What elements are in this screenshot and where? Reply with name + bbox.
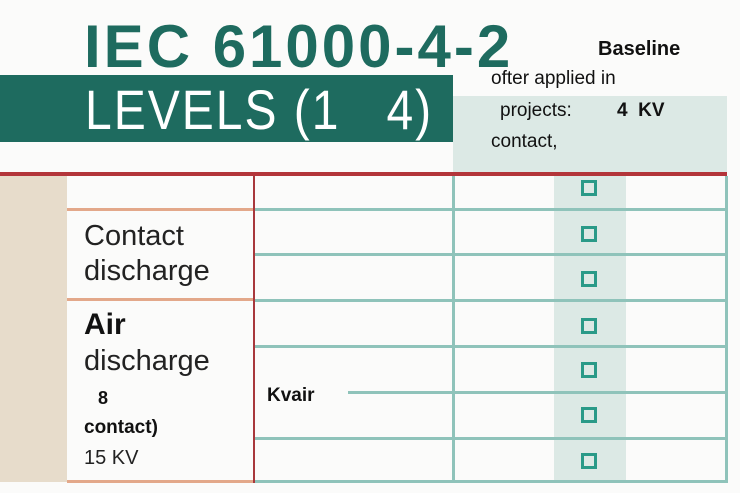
beige strip <box>0 176 67 482</box>
label: air discharge <box>84 308 210 469</box>
label: air discharge: contact) <box>84 417 158 438</box>
header band: levels <box>0 75 453 142</box>
note text <box>491 38 680 152</box>
red rule <box>0 172 727 176</box>
table <box>67 176 728 483</box>
label: contact discharge <box>84 220 210 287</box>
note text: 4 KV <box>617 100 665 121</box>
label: air discharge: Air <box>84 308 126 341</box>
title: IEC 61000-4-2 <box>84 13 513 80</box>
label: air discharge: discharge <box>84 345 210 377</box>
label: air discharge: 15 KV <box>84 447 138 469</box>
label: Kvair: Kvair <box>267 385 315 406</box>
note panel <box>453 96 727 172</box>
note text: ofter applied in <box>491 68 616 89</box>
note text: contact, <box>491 131 558 152</box>
subtitle: LEVELS (1 4) <box>85 81 433 142</box>
checkbox column <box>581 180 597 469</box>
note text: Baseline <box>598 38 680 60</box>
label: air discharge: 8 <box>98 388 108 408</box>
label: contact discharge: Contact <box>84 220 184 252</box>
label: contact discharge: discharge <box>84 255 210 287</box>
note text: projects: <box>500 100 572 121</box>
